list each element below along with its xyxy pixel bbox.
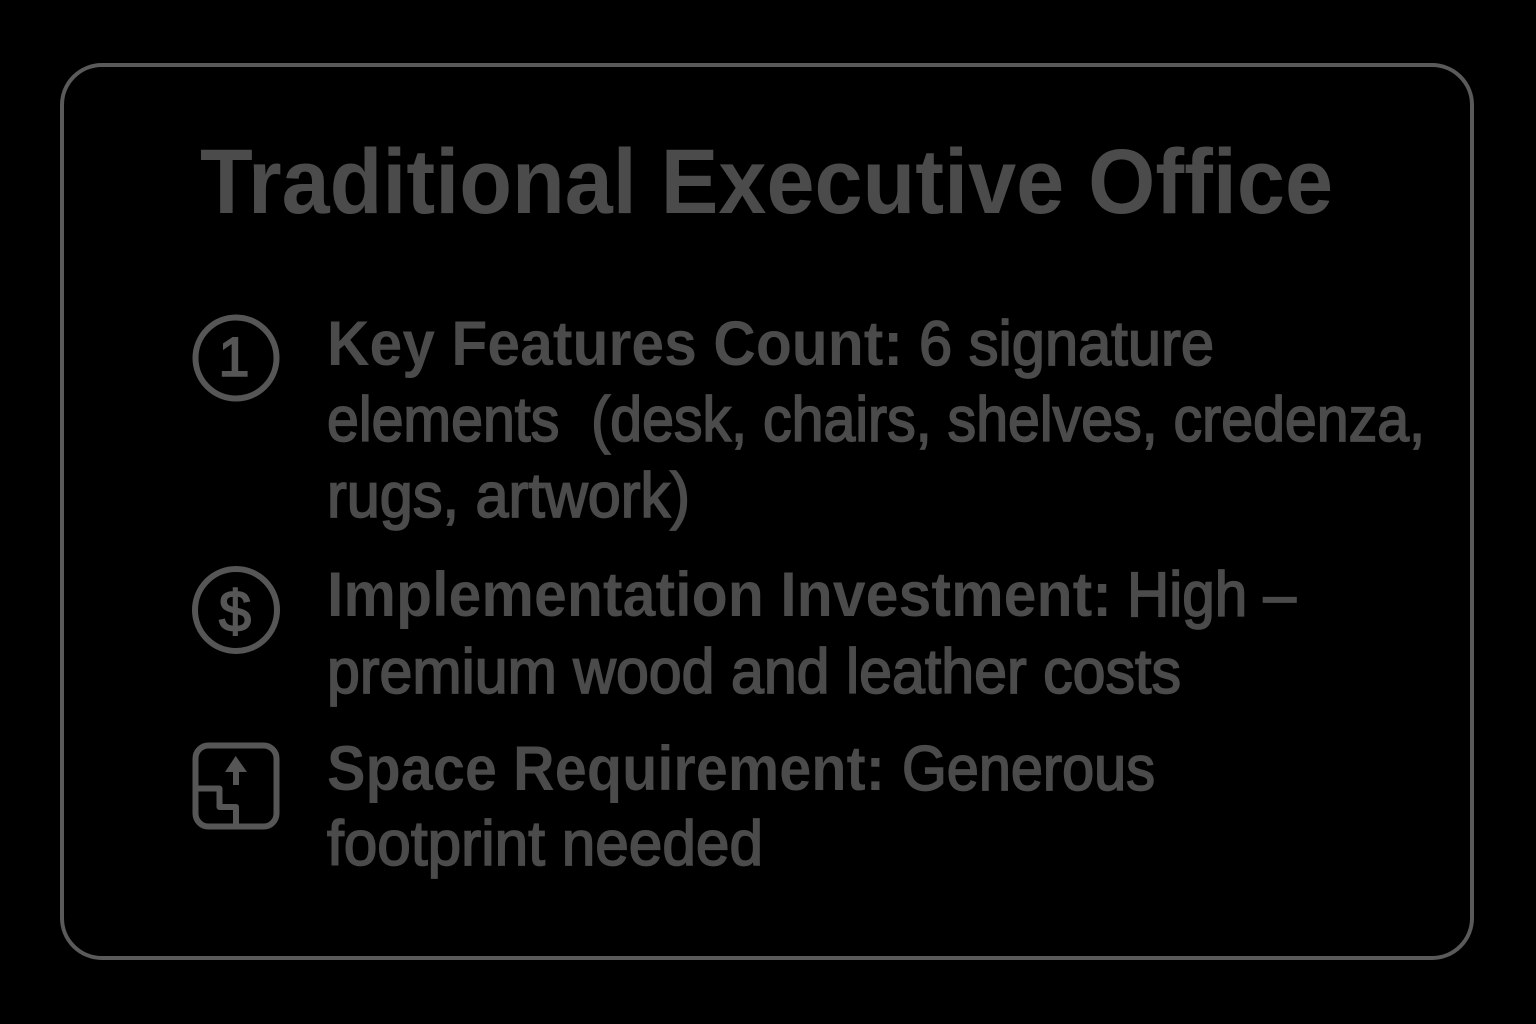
text: key features description: elements (desk, chairs, shelves, credenza,	[327, 385, 1425, 455]
text: investment description: Implementation Investment:	[327, 560, 1112, 630]
icon: numbered circle	[196, 318, 276, 398]
icon: floor plan with arrow	[196, 746, 276, 826]
title: Traditional Executive Office	[200, 131, 1333, 233]
text: key features description	[327, 309, 1425, 531]
icon: numbered circle: 1	[218, 325, 250, 388]
icon: dollar circle: $	[219, 579, 251, 644]
text: investment description: High –	[1127, 560, 1296, 630]
icon: dollar circle	[195, 569, 277, 651]
text: investment description	[327, 560, 1296, 707]
text: key features description: rugs, artwork)	[327, 461, 690, 531]
text: key features description: Key Features Count:	[327, 309, 903, 379]
item: key features count	[196, 309, 1425, 531]
item: implementation investment	[195, 560, 1296, 707]
text: space description	[327, 734, 1155, 879]
text: space description: footprint needed	[327, 809, 763, 879]
text: space description: Generous	[902, 734, 1155, 804]
item: space requirement	[196, 734, 1155, 879]
text: key features description: 6 signature	[919, 309, 1214, 379]
text: space description: Space Requirement:	[327, 734, 885, 804]
text: investment description: premium wood and leather costs	[327, 637, 1181, 707]
